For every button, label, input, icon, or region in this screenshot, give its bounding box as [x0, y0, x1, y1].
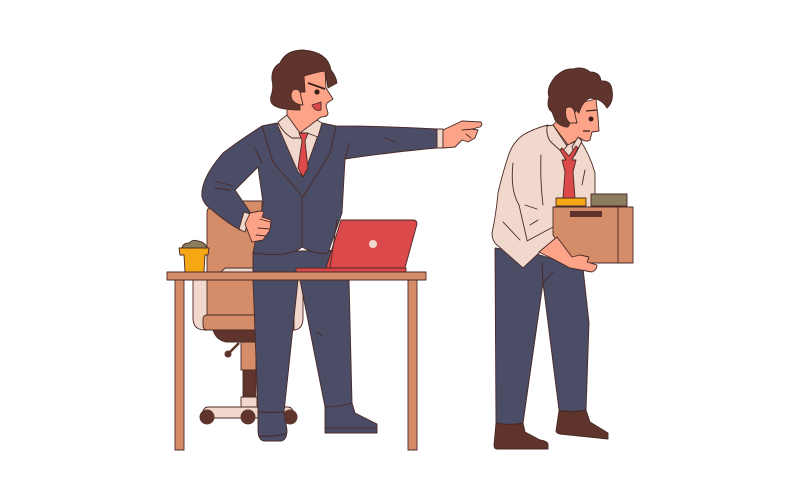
red laptop — [296, 220, 417, 272]
boss figure — [202, 50, 482, 441]
dismissed employee figure — [492, 68, 633, 449]
boss head — [271, 50, 337, 133]
boss hand on hip — [239, 211, 271, 242]
employee forearm and hand — [539, 237, 597, 272]
desk — [167, 272, 426, 450]
office chair — [193, 201, 303, 424]
employee head — [548, 68, 612, 145]
boss trousers and shoes — [253, 250, 377, 441]
employee shirt — [492, 125, 595, 268]
employee collar and tie — [547, 125, 582, 198]
boss jacket and pointing arm — [202, 123, 437, 255]
boss pointing hand — [437, 121, 482, 148]
employee cardboard box with books — [553, 194, 633, 263]
paper on desk — [221, 268, 283, 272]
employee shoes — [494, 410, 608, 449]
potted plant — [179, 240, 209, 272]
boss shirt collar and tie — [277, 115, 322, 177]
employee trousers — [495, 248, 589, 424]
